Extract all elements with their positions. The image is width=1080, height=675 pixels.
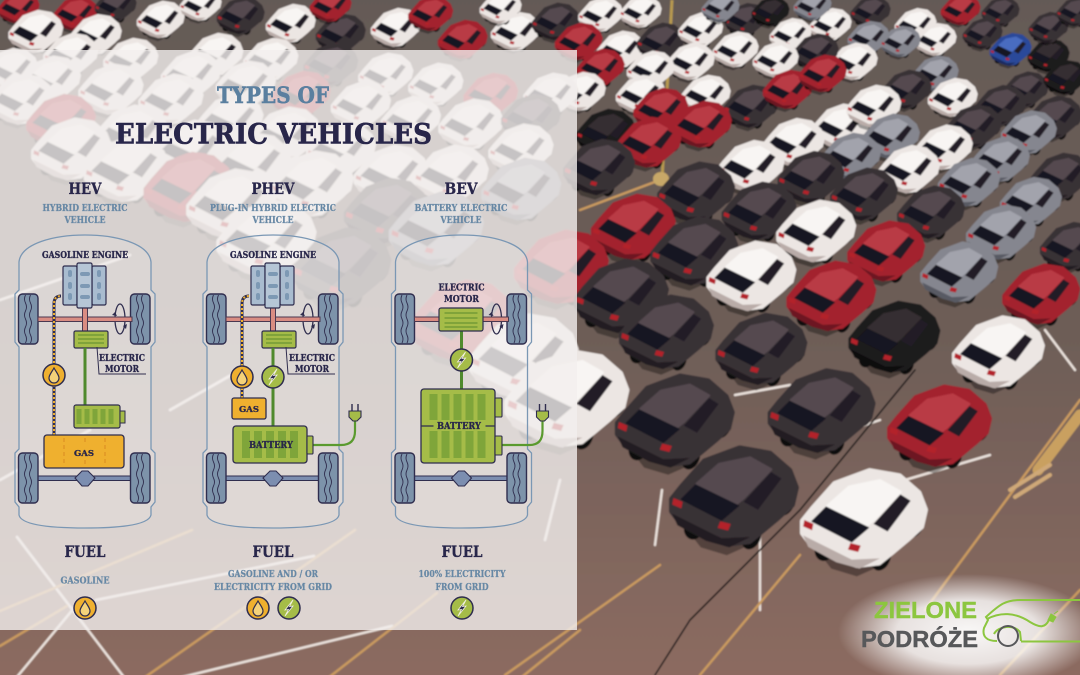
- BEV heading: BATTERY ELECTRIC: [414, 203, 508, 214]
- BEV heading: [414, 179, 508, 226]
- BEV diagram: [392, 235, 548, 528]
- HEV fuel: GASOLINE: [60, 576, 110, 586]
- BEV fuel: [418, 542, 506, 619]
- PHEV diagram: MOTOR: [295, 365, 330, 375]
- logo: Zielone Podróże: PODRÓŻE: [861, 625, 978, 652]
- back rows: [0, 0, 1080, 329]
- PHEV diagram: [203, 235, 361, 528]
- panel: BEV: [392, 179, 548, 619]
- HEV heading: [42, 179, 128, 226]
- PHEV fuel: ELECTRICITY FROM GRID: [214, 582, 332, 593]
- BEV diagram: ELECTRIC: [438, 284, 484, 294]
- HEV heading: HYBRID ELECTRIC: [42, 203, 128, 214]
- PHEV diagram: GASOLINE ENGINE: [230, 251, 316, 261]
- BEV fuel: FUEL: [442, 542, 482, 561]
- HEV fuel: [60, 542, 110, 619]
- HEV fuel: FUEL: [64, 542, 106, 561]
- lamp post: [662, 0, 672, 180]
- logo: Zielone Podróże: ZIELONE: [874, 597, 977, 623]
- HEV diagram: GASOLINE ENGINE: [42, 251, 128, 261]
- logo: Zielone Podróże: [838, 574, 1080, 675]
- front rows: [576, 261, 1045, 576]
- HEV diagram: GAS: [74, 449, 94, 459]
- panel: PHEV: [203, 179, 361, 619]
- HEV heading: HEV: [68, 179, 102, 198]
- PHEV diagram: GAS: [239, 405, 259, 415]
- HEV heading: VEHICLE: [64, 215, 106, 226]
- PHEV diagram: BATTERY: [249, 441, 294, 451]
- BEV heading: VEHICLE: [440, 215, 482, 226]
- HEV diagram: [15, 235, 155, 528]
- PHEV heading: PHEV: [252, 179, 295, 198]
- title: TYPES OF: [217, 83, 329, 109]
- PHEV fuel: FUEL: [252, 542, 294, 561]
- PHEV diagram: ELECTRIC: [289, 354, 335, 364]
- PHEV fuel: [214, 542, 332, 619]
- PHEV heading: PLUG-IN HYBRID ELECTRIC: [210, 203, 336, 214]
- HEV diagram: ELECTRIC: [99, 354, 145, 364]
- BEV heading: BEV: [444, 179, 478, 198]
- HEV diagram: MOTOR: [105, 365, 140, 375]
- hazed left rows: [0, 34, 630, 455]
- title: [115, 83, 432, 150]
- panel: HEV: [15, 179, 155, 619]
- BEV diagram: MOTOR: [444, 295, 480, 305]
- title: ELECTRIC VEHICLES: [115, 118, 432, 150]
- BEV diagram: BATTERY: [437, 422, 482, 432]
- BEV fuel: 100% ELECTRICITY: [418, 569, 506, 580]
- BEV fuel: FROM GRID: [436, 582, 488, 593]
- panel: infographic backdrop: [0, 50, 577, 630]
- PHEV heading: VEHICLE: [252, 215, 294, 226]
- PHEV heading: [210, 179, 336, 226]
- PHEV fuel: GASOLINE AND / OR: [228, 569, 319, 580]
